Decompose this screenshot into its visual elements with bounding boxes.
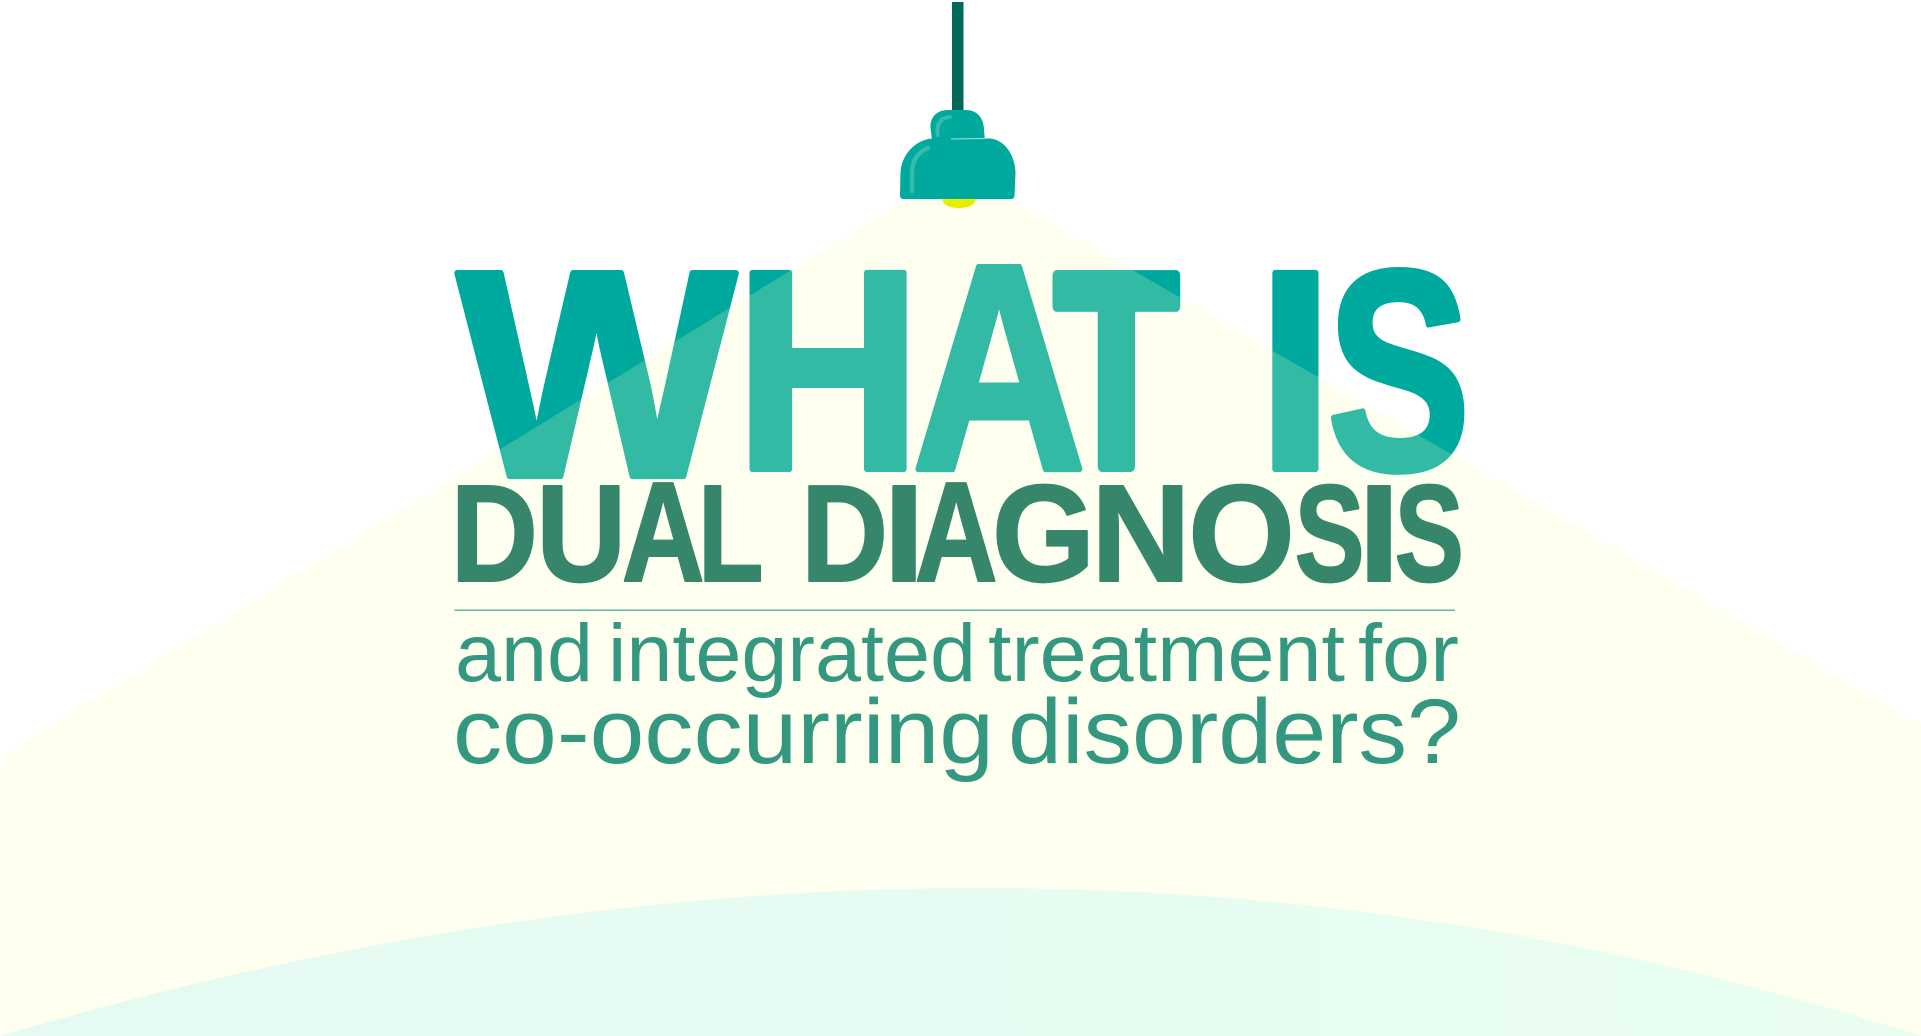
title line: WHAT IS: S: [1327, 211, 1471, 530]
lamp seam highlight: [951, 138, 985, 140]
subtitle line 1: [455, 608, 1459, 699]
subtitle line 1: treatment: [988, 608, 1345, 699]
title line: DUAL DIAGNOSIS: U: [536, 456, 626, 610]
subtitle line 2: disorders?: [1008, 681, 1461, 783]
subtitle line 1: for: [1358, 608, 1459, 699]
lamp cap: [930, 110, 985, 140]
title line: DUAL DIAGNOSIS: L: [698, 457, 764, 611]
title line: DUAL DIAGNOSIS: O: [1188, 457, 1295, 611]
title line: DUAL DIAGNOSIS: I: [884, 457, 925, 611]
title line: DUAL DIAGNOSIS: N: [1091, 457, 1191, 611]
title line: DUAL DIAGNOSIS: S: [1395, 456, 1464, 610]
title line: DUAL DIAGNOSIS: G: [992, 457, 1095, 611]
divider: [454, 610, 1455, 611]
title line: WHAT IS: A: [912, 203, 1086, 531]
title line: WHAT IS: I: [1257, 211, 1334, 530]
title line: DUAL DIAGNOSIS: D: [801, 457, 888, 611]
title line: DUAL DIAGNOSIS: A: [915, 453, 998, 612]
title line: DUAL DIAGNOSIS: D: [451, 458, 538, 611]
title line: DUAL DIAGNOSIS: A: [622, 453, 705, 612]
title line: WHAT IS: [457, 203, 1471, 539]
lamp dome: [900, 138, 1016, 199]
green floor hump: [0, 888, 1921, 1036]
lamp dome highlight: [912, 148, 928, 191]
title line: DUAL DIAGNOSIS: [451, 453, 1464, 612]
subtitle line 1: and: [455, 608, 593, 699]
subtitle line 2: co-occurring: [453, 681, 994, 783]
lamp cord: [952, 2, 964, 112]
lamp cap highlight: [938, 117, 950, 135]
title line: DUAL DIAGNOSIS: S: [1295, 456, 1365, 610]
title line: DUAL DIAGNOSIS: I: [1358, 457, 1400, 611]
title line: WHAT IS: H: [735, 211, 921, 530]
subtitle line 2: [453, 681, 1461, 783]
title line: WHAT IS: T: [1054, 216, 1178, 526]
subtitle line 1: integrated: [608, 608, 976, 699]
hanging lamp: [900, 2, 1016, 208]
lamp bulb: [942, 198, 976, 208]
title line: WHAT IS: W: [457, 209, 739, 539]
